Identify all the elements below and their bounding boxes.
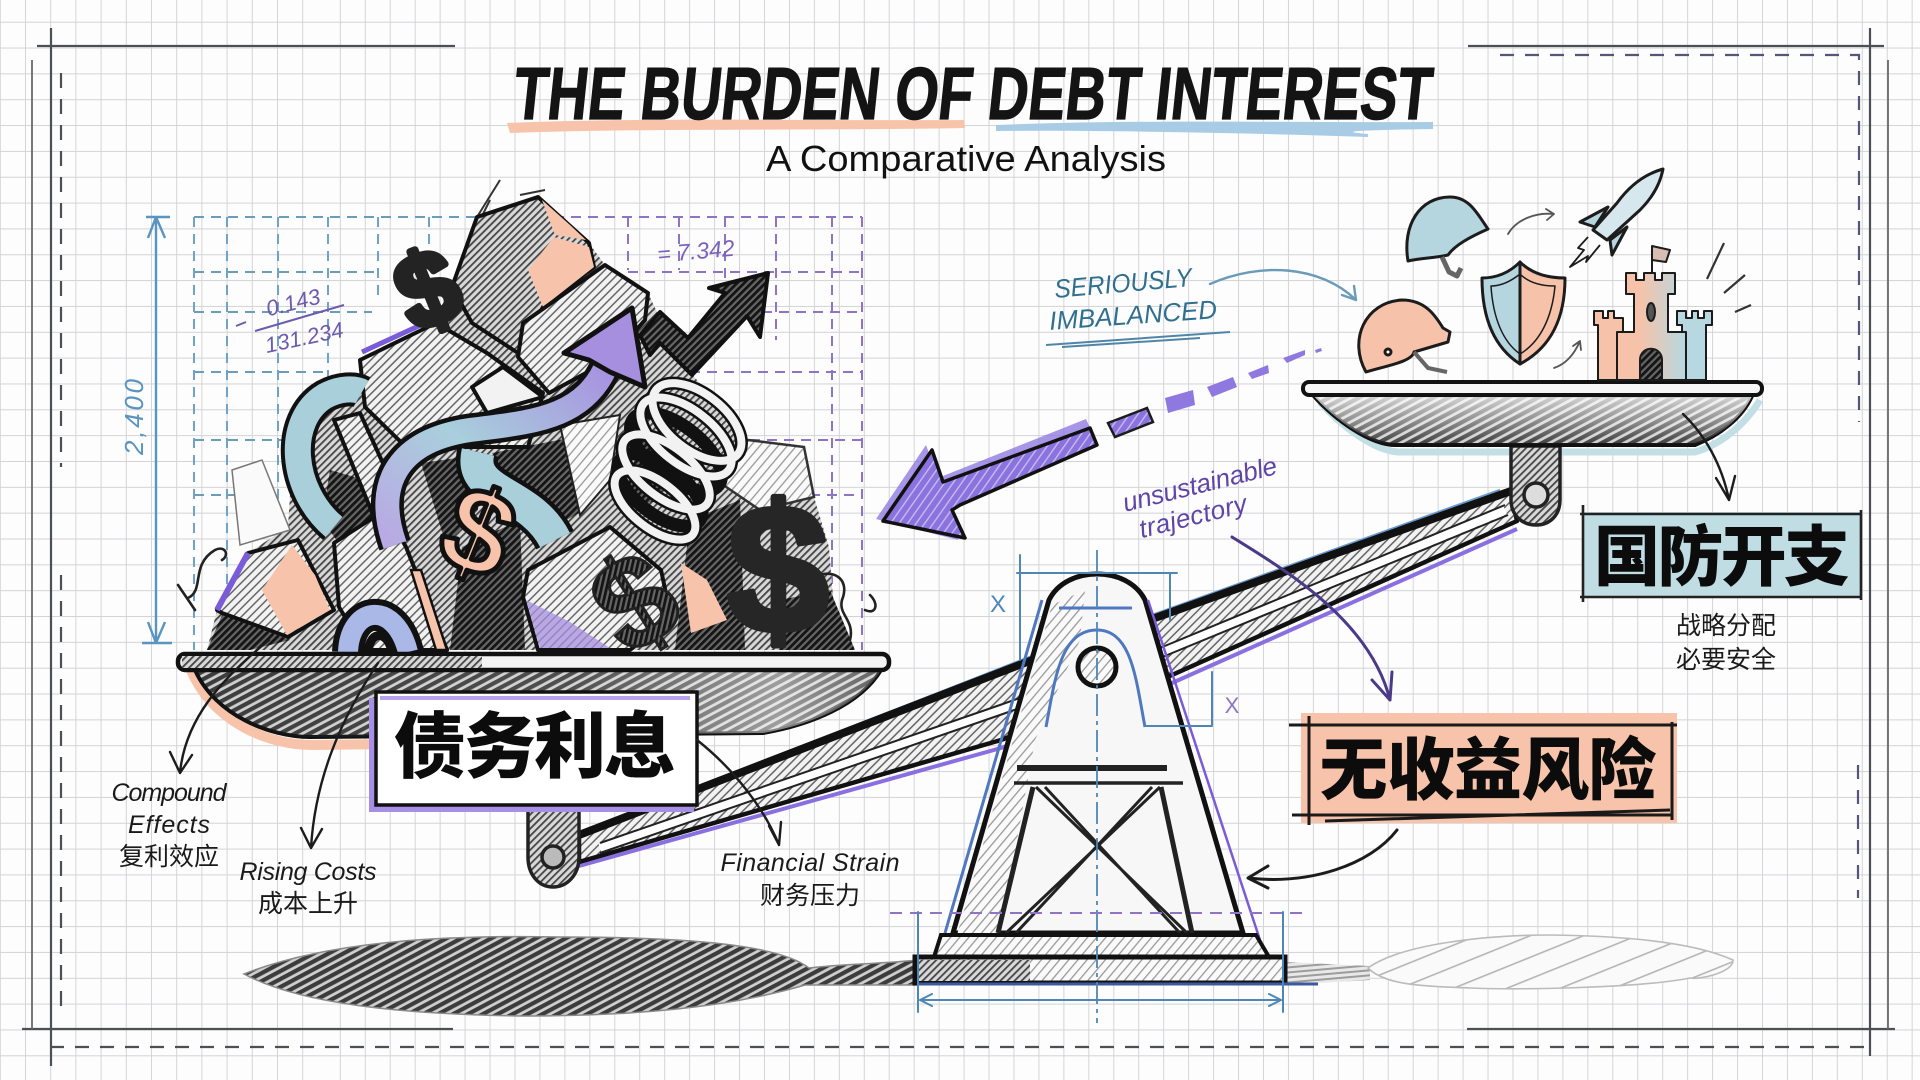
- title text: THE BURDEN OF DEBT INTEREST: [510, 52, 1437, 135]
- handwritten formula: 0.143 over 131.234: 131.234: [263, 317, 346, 358]
- rock: right: [716, 440, 814, 510]
- purple construction outline: [1148, 600, 1260, 940]
- handwritten formula: 0.143 over 131.234: [236, 284, 346, 358]
- impact strokes beside castle: [1707, 243, 1751, 312]
- small arrow: shield to castle: [1554, 341, 1581, 368]
- arrow: annotation to shields: [1210, 270, 1356, 300]
- pivot pin: [1078, 648, 1116, 686]
- callout: compound effects: Effects: [128, 811, 210, 839]
- dimension arrow 2,400: [119, 217, 172, 643]
- dollar sign: top left: $: [379, 225, 477, 355]
- annotation: seriously imbalanced: [1046, 262, 1230, 347]
- pan bowl: [195, 670, 881, 737]
- rock: small pale: [472, 367, 543, 413]
- callout: rising costs: 成本上升: [258, 890, 358, 918]
- title: [507, 52, 1437, 137]
- cross brace: [998, 768, 1192, 933]
- sublabel: strategic allocation: 必要安全: [1676, 646, 1776, 674]
- blue curved band left: [298, 389, 362, 527]
- peach shard right: [681, 563, 727, 633]
- dollar sign: hatched tilted: $: [565, 520, 704, 683]
- arrow: pan to defence label: [1683, 414, 1735, 500]
- balance beam: [579, 490, 1517, 866]
- pan rim: [178, 654, 889, 670]
- callout: financial strain: [697, 740, 900, 910]
- arrow: risk label to fulcrum: [1248, 830, 1397, 888]
- handwritten value 7.342: = 7.342: [656, 235, 736, 267]
- pile silhouette: [207, 197, 855, 650]
- label box: risk-free yield: [1289, 713, 1677, 825]
- icon: rocket: [1570, 169, 1663, 267]
- fulcrum dimension lines: X: [1225, 693, 1240, 718]
- rock: large left: [360, 323, 543, 447]
- right hanger: [1511, 446, 1560, 525]
- ground shadow right: [1285, 935, 1733, 989]
- rock: lower centre: [523, 527, 671, 650]
- blue S band: [477, 452, 555, 540]
- callout: compound effects: 复利效应: [119, 843, 219, 871]
- label box: debt interest: [369, 692, 697, 812]
- title underline: orange: [507, 120, 965, 133]
- dollar sign: peach: $: [422, 457, 534, 607]
- rock: mid-left: [334, 510, 447, 650]
- sublabel: strategic allocation: 战略分配: [1676, 612, 1776, 640]
- rising swoosh arrow: [387, 308, 645, 545]
- grey zigzag arrow up: [640, 273, 768, 375]
- annotation: unsustainable trajectory: unsustainable: [1119, 450, 1280, 518]
- label box: risk-free yield: 无收益风险: [1320, 733, 1656, 809]
- ground shadow left: [244, 937, 918, 1016]
- rock: lower left with peach face: [217, 540, 334, 637]
- debt pile: [178, 180, 875, 683]
- left hanger: [528, 800, 579, 887]
- annotation: seriously imbalanced: IMBALANCED: [1048, 294, 1218, 336]
- coin ring at base: [348, 615, 408, 652]
- big dashed purple arrow: [876, 348, 1322, 540]
- fulcrum stand: [915, 574, 1318, 984]
- icon: blue helmet: [1407, 197, 1488, 276]
- annotation: unsustainable trajectory: trajectory: [1136, 488, 1252, 544]
- callout: compound effects: [112, 640, 269, 871]
- label box: debt interest: 债务利息: [394, 708, 676, 788]
- icon: shield: [1482, 262, 1565, 364]
- dollar sign: large black: $: [727, 467, 829, 671]
- label box: defence spending: 国防开支: [1594, 520, 1850, 594]
- subtitle: A Comparative Analysis: [766, 138, 1166, 179]
- dimension arrow 2,400: 2,400: [119, 378, 149, 456]
- fulcrum dimension lines: [890, 550, 1304, 1023]
- sublabel: strategic allocation: [1676, 612, 1776, 674]
- callout: financial strain: 财务压力: [760, 882, 860, 910]
- title underline: blue: [996, 122, 1433, 137]
- sketch lines above the top rock: [470, 180, 545, 240]
- callout: financial strain: Financial Strain: [720, 849, 900, 877]
- rock: second: [518, 265, 648, 393]
- rock: left faint: [232, 460, 290, 545]
- light hatched rock centre: [560, 415, 620, 515]
- label box: defence spending: [1580, 505, 1862, 602]
- spring coil: [603, 368, 755, 553]
- icon: castle: [1594, 246, 1712, 380]
- pan rim: [1303, 382, 1762, 395]
- dashed measurement grid behind the pile: [194, 217, 862, 650]
- rock slab: [334, 413, 402, 522]
- callout: rising costs: Rising Costs: [240, 858, 376, 886]
- right pan: [1303, 382, 1762, 525]
- callout: rising costs: [240, 663, 378, 918]
- icon: peach helmet: [1359, 300, 1450, 372]
- dark shaded gaps between rocks: [207, 420, 855, 650]
- squiggly wires: [178, 549, 875, 640]
- fulcrum dimension lines: X: [990, 591, 1006, 618]
- peach face on top rock: [528, 200, 594, 307]
- handwritten formula: 0.143 over 131.234: 0.143: [263, 284, 324, 321]
- callout: compound effects: Compound: [112, 779, 228, 807]
- purple edge on large rock: [362, 318, 436, 352]
- annotation: seriously imbalanced: SERIOUSLY: [1053, 262, 1195, 304]
- left pan: [178, 654, 889, 745]
- fulcrum body: [953, 574, 1243, 933]
- pan bowl: [1313, 395, 1752, 445]
- blue construction outline: [945, 600, 1145, 933]
- base steps: [934, 935, 1269, 957]
- rock: top with peach face: [452, 197, 594, 353]
- small arrow: helmet to rocket: [1508, 209, 1554, 234]
- purple trajectory arrow: [1232, 537, 1392, 700]
- peach shard: [411, 570, 447, 650]
